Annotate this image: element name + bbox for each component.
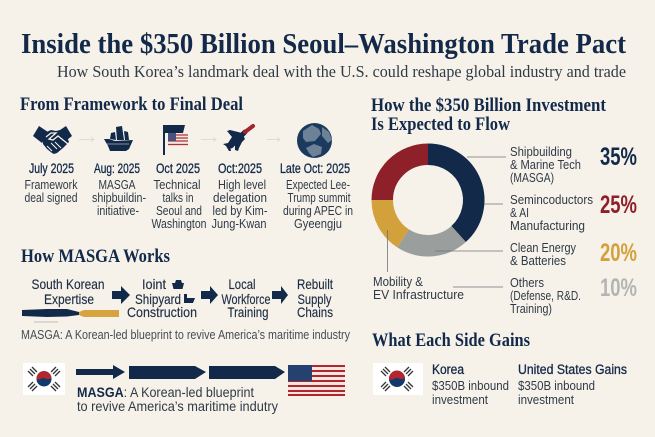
step: oct 2025 delegation: led by Kim- xyxy=(212,204,268,218)
step: workforce: Training xyxy=(228,304,268,320)
step: oct 2025: Technical xyxy=(154,178,200,192)
label: semiconductors xyxy=(510,193,593,233)
arrow xyxy=(201,286,218,304)
step: supply chains: Supply xyxy=(298,291,332,307)
label: mobility xyxy=(373,275,464,302)
gains: Korea: $350B inbound xyxy=(432,379,509,393)
arrow band xyxy=(76,365,285,379)
heading: investment: How the $350 Billion Investment xyxy=(371,96,607,116)
step: workforce: Local xyxy=(228,276,256,292)
step: expertise: South Korean xyxy=(32,276,104,292)
step: oct 2025 delegation: High level xyxy=(218,178,266,192)
step: oct 2025 delegation: delegation xyxy=(213,191,267,205)
label: mobility: EV Infrastructure xyxy=(373,288,464,302)
panel: timeline xyxy=(20,95,353,231)
step: joint shipyard: Construction xyxy=(127,304,197,320)
label: clean energy xyxy=(510,241,577,268)
callout xyxy=(77,384,278,414)
step: joint shipyard xyxy=(127,276,197,320)
label: others: (Defense, R&D. xyxy=(510,289,581,303)
subtitle: How South Korea’s landmark deal with the U.S. could reshape global industry and trade xyxy=(57,62,626,81)
step: supply chains: Chains xyxy=(297,304,333,320)
callout: MASGA: A Korean-led blueprint xyxy=(77,384,254,400)
gains: United States: United States Gains xyxy=(518,362,627,377)
icon: Korean flag xyxy=(373,363,423,395)
panel: investment flow xyxy=(371,96,637,316)
donut chart xyxy=(382,154,474,246)
label: shipbuilding: Shipbuilding xyxy=(510,145,572,159)
heading: timeline: From Framework to Final Deal xyxy=(20,95,243,115)
heading: MASGA: How MASGA Works xyxy=(21,247,170,267)
step: oct 2025 delegation xyxy=(212,161,268,231)
value: 20%: 20% xyxy=(600,239,637,267)
label: shipbuilding: & Marine Tech xyxy=(510,158,581,172)
panel: how MASGA works xyxy=(21,247,351,414)
callout: to revive America’s maritime indutry xyxy=(77,398,278,414)
value: 10%: 10% xyxy=(600,274,637,302)
icon: handshake xyxy=(33,126,72,154)
gains: United States xyxy=(518,362,627,407)
step: supply chains: Rebuilt xyxy=(297,276,333,292)
step: workforce xyxy=(222,276,271,320)
panel: gains xyxy=(372,331,627,407)
arrow xyxy=(201,137,216,142)
step: late oct 2025: Trump summit xyxy=(288,191,351,205)
step: aug 2025: shipbuildin- xyxy=(92,191,146,205)
label: semiconductors: & AI xyxy=(510,206,529,220)
label: others: Training) xyxy=(510,302,552,316)
step: late oct 2025: Late Oct: 2025 xyxy=(280,161,350,176)
step: joint shipyard: Shipyard xyxy=(135,291,181,307)
icon: ship xyxy=(104,126,133,151)
heading: investment xyxy=(371,96,607,135)
step: late oct 2025: Gyeengju xyxy=(294,217,342,231)
arrow xyxy=(267,137,280,142)
step: july 2025: Framework xyxy=(24,178,78,192)
icon: small ships xyxy=(172,280,195,303)
step: oct 2025: Oct 2025 xyxy=(156,161,200,176)
gains: Korea xyxy=(432,362,509,407)
step: aug 2025: MASGA xyxy=(98,178,136,192)
step: aug 2025: initiative- xyxy=(97,204,139,218)
step: aug 2025 xyxy=(92,161,146,218)
step: expertise xyxy=(32,276,104,307)
step: july 2025: deal signed xyxy=(24,191,78,205)
step: late oct 2025: Expected Lee- xyxy=(286,178,350,192)
caption: MASGA: A Korean-led blueprint to revive America’s maritime industry xyxy=(21,328,351,342)
icon: globe xyxy=(297,123,332,158)
icon: airplane xyxy=(223,126,253,151)
step: late oct 2025: during APEC in xyxy=(283,204,353,218)
icon: flag xyxy=(163,125,188,155)
step: oct 2025 delegation: Jung-Kwan xyxy=(212,217,267,231)
step: oct 2025 xyxy=(152,161,207,231)
label: others xyxy=(510,276,581,316)
step: oct 2025: Washington xyxy=(152,217,207,231)
label: mobility: Mobility & xyxy=(373,275,424,289)
label: shipbuilding xyxy=(510,145,581,185)
step: oct 2025: talks in xyxy=(162,191,194,205)
heading: gains: What Each Side Gains xyxy=(372,331,530,351)
label: semiconductors: Manufacturing xyxy=(510,219,585,233)
value: 25%: 25% xyxy=(600,191,637,219)
label: semiconductors: Semincoductors xyxy=(510,193,593,207)
step: oct 2025: Seoul and xyxy=(156,204,202,218)
leader lines xyxy=(388,157,506,287)
icon: Korean flag xyxy=(23,363,65,395)
gains: United States: $350B inbound xyxy=(518,379,595,393)
gains: United States: investment xyxy=(518,393,574,407)
step: aug 2025: Aug: 2025 xyxy=(94,161,140,176)
step: workforce: Workforce xyxy=(222,291,271,307)
step: july 2025 xyxy=(24,161,78,205)
heading: investment: Is Expected to Flow xyxy=(371,115,511,135)
arrow xyxy=(79,137,94,142)
step: late oct 2025 xyxy=(280,161,353,231)
label: shipbuilding: (MASGA) xyxy=(510,171,554,185)
icon: US flag xyxy=(288,365,345,396)
step: oct 2025 delegation: Oct:2025 xyxy=(218,161,262,176)
gains: Korea: Korea xyxy=(432,362,464,377)
label: others: Others xyxy=(510,276,544,290)
tapered bar xyxy=(22,309,119,322)
gains: Korea: investment xyxy=(432,393,488,407)
arrow xyxy=(112,286,130,304)
step: joint shipyard: Ioint xyxy=(142,276,166,292)
arrow xyxy=(272,286,288,304)
step: expertise: Expertise xyxy=(44,291,94,307)
value: 35%: 35% xyxy=(600,143,637,171)
step: supply chains xyxy=(297,276,333,320)
label: clean energy: & Batteries xyxy=(510,254,566,268)
step: july 2025: July 2025 xyxy=(29,161,74,176)
label: clean energy: Clean Energy xyxy=(510,241,577,255)
